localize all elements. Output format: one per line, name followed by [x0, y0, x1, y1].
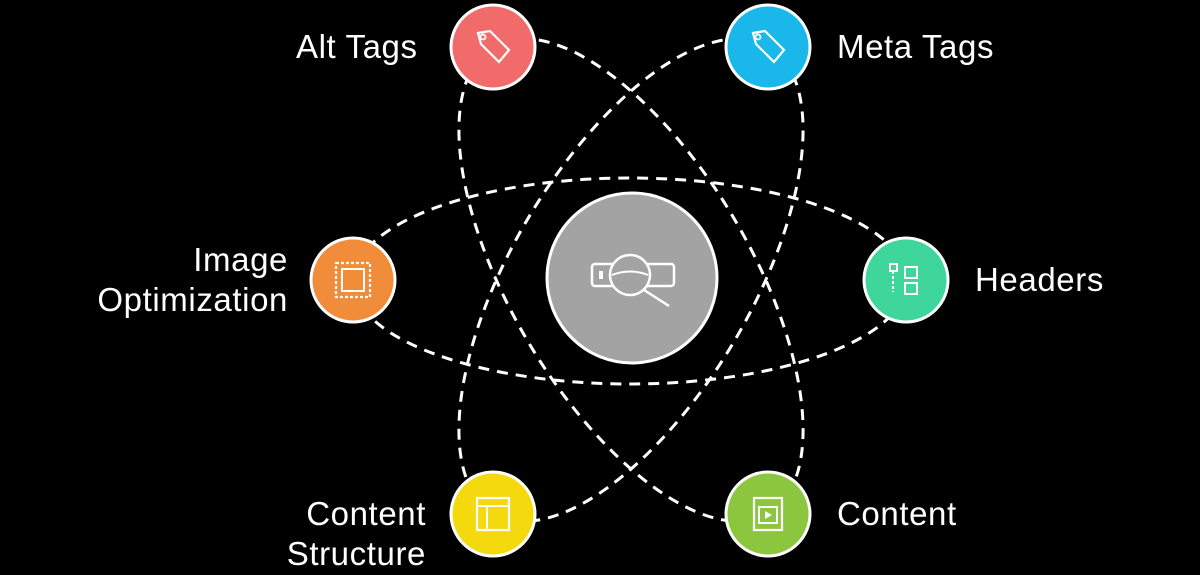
label: Image Optimization: Image: [193, 241, 288, 278]
label: Meta Tags: Meta Tags: [837, 28, 994, 65]
node: Content Structure: [451, 472, 535, 556]
label: Headers: Headers: [975, 261, 1104, 298]
label: Alt Tags: Alt Tags: [296, 28, 418, 65]
node: Headers: [864, 238, 948, 322]
center circle with search icon: [547, 193, 717, 363]
node: Meta Tags: [726, 5, 810, 89]
node: Alt Tags: [451, 5, 535, 89]
orbit: horizontal ellipse: [353, 178, 907, 384]
label: Content Structure: [287, 495, 426, 572]
node: Image Optimization: [311, 238, 395, 322]
label: Content Structure: Content: [306, 495, 426, 532]
label: Content Structure: Structure: [287, 535, 426, 572]
orbit: tilted ellipse B: [390, 0, 872, 574]
node: Content: [726, 472, 810, 556]
orbit: tilted ellipse A: [390, 0, 872, 574]
label: Image Optimization: Optimization: [97, 281, 288, 318]
label: Image Optimization: [97, 241, 288, 318]
label: Content: Content: [837, 495, 957, 532]
